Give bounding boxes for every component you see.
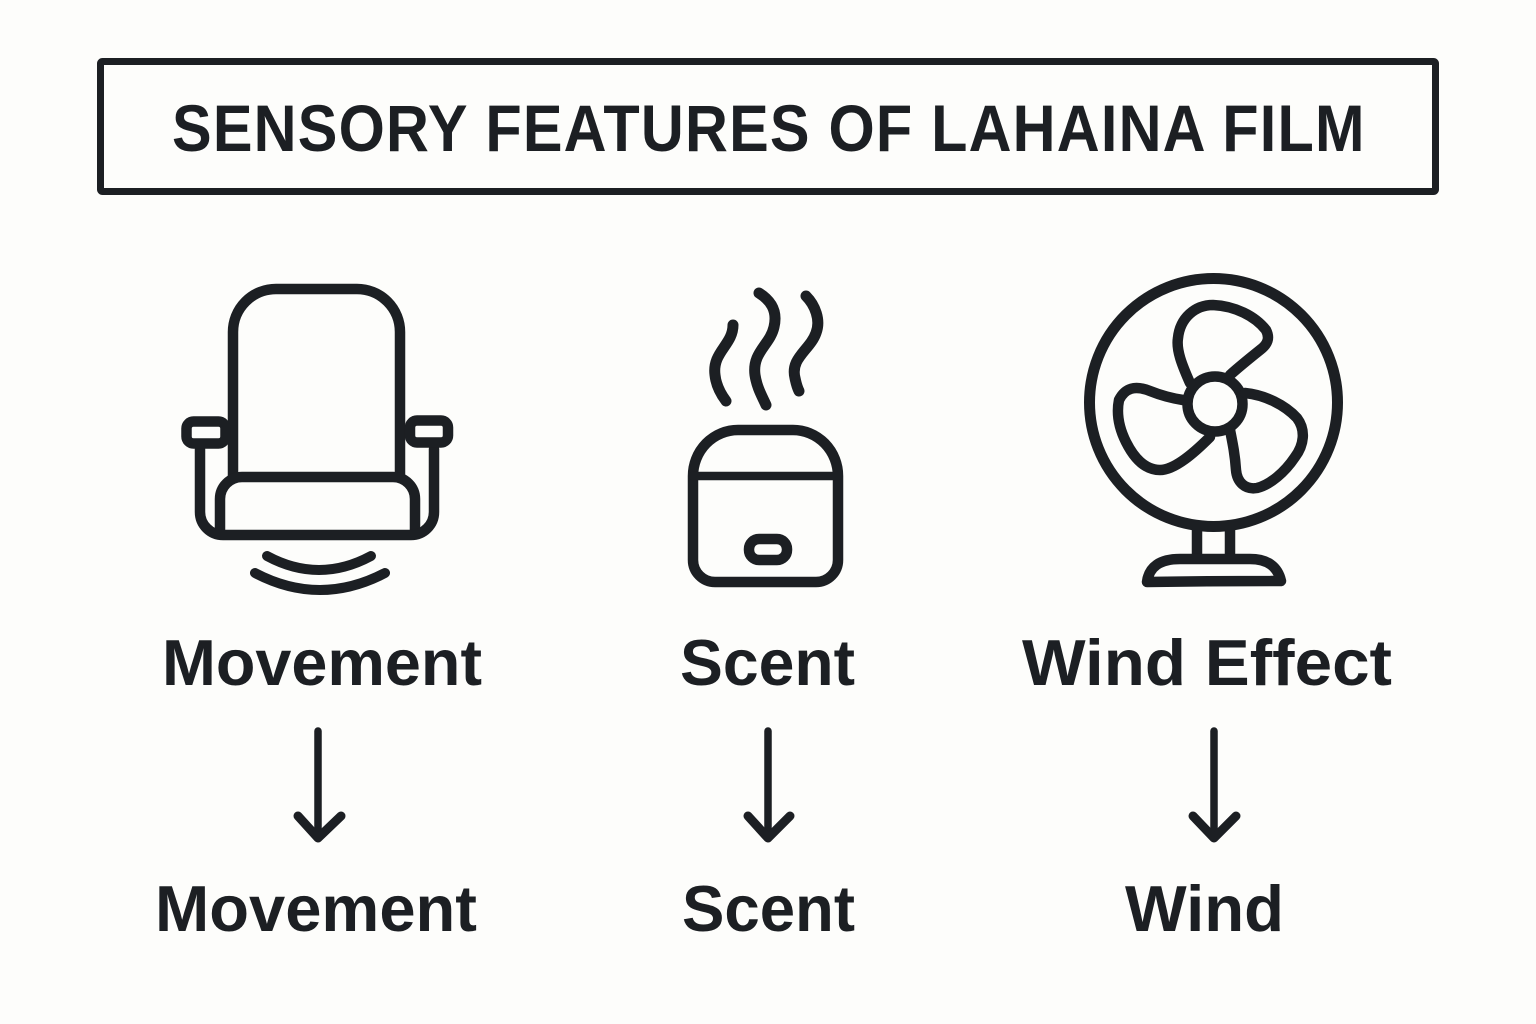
icon: desk fan — [1090, 278, 1338, 582]
result: Wind: Wind — [1125, 872, 1284, 945]
arrow: scent — [748, 731, 790, 838]
label: Movement: Movement — [162, 626, 482, 699]
icon: theater seat with motion — [186, 289, 448, 590]
label: Scent: Scent — [680, 626, 855, 699]
title: SENSORY FEATURES OF LAHAINA FILM — [172, 92, 1365, 166]
arrow: movement — [298, 731, 341, 838]
result: Scent: Scent — [682, 872, 855, 945]
result: Movement: Movement — [155, 872, 477, 945]
arrow: wind — [1193, 731, 1236, 838]
icon: scent diffuser with vapor — [693, 293, 838, 582]
label: Wind Effect: Wind Effect — [1022, 626, 1392, 699]
title box — [100, 62, 1436, 192]
